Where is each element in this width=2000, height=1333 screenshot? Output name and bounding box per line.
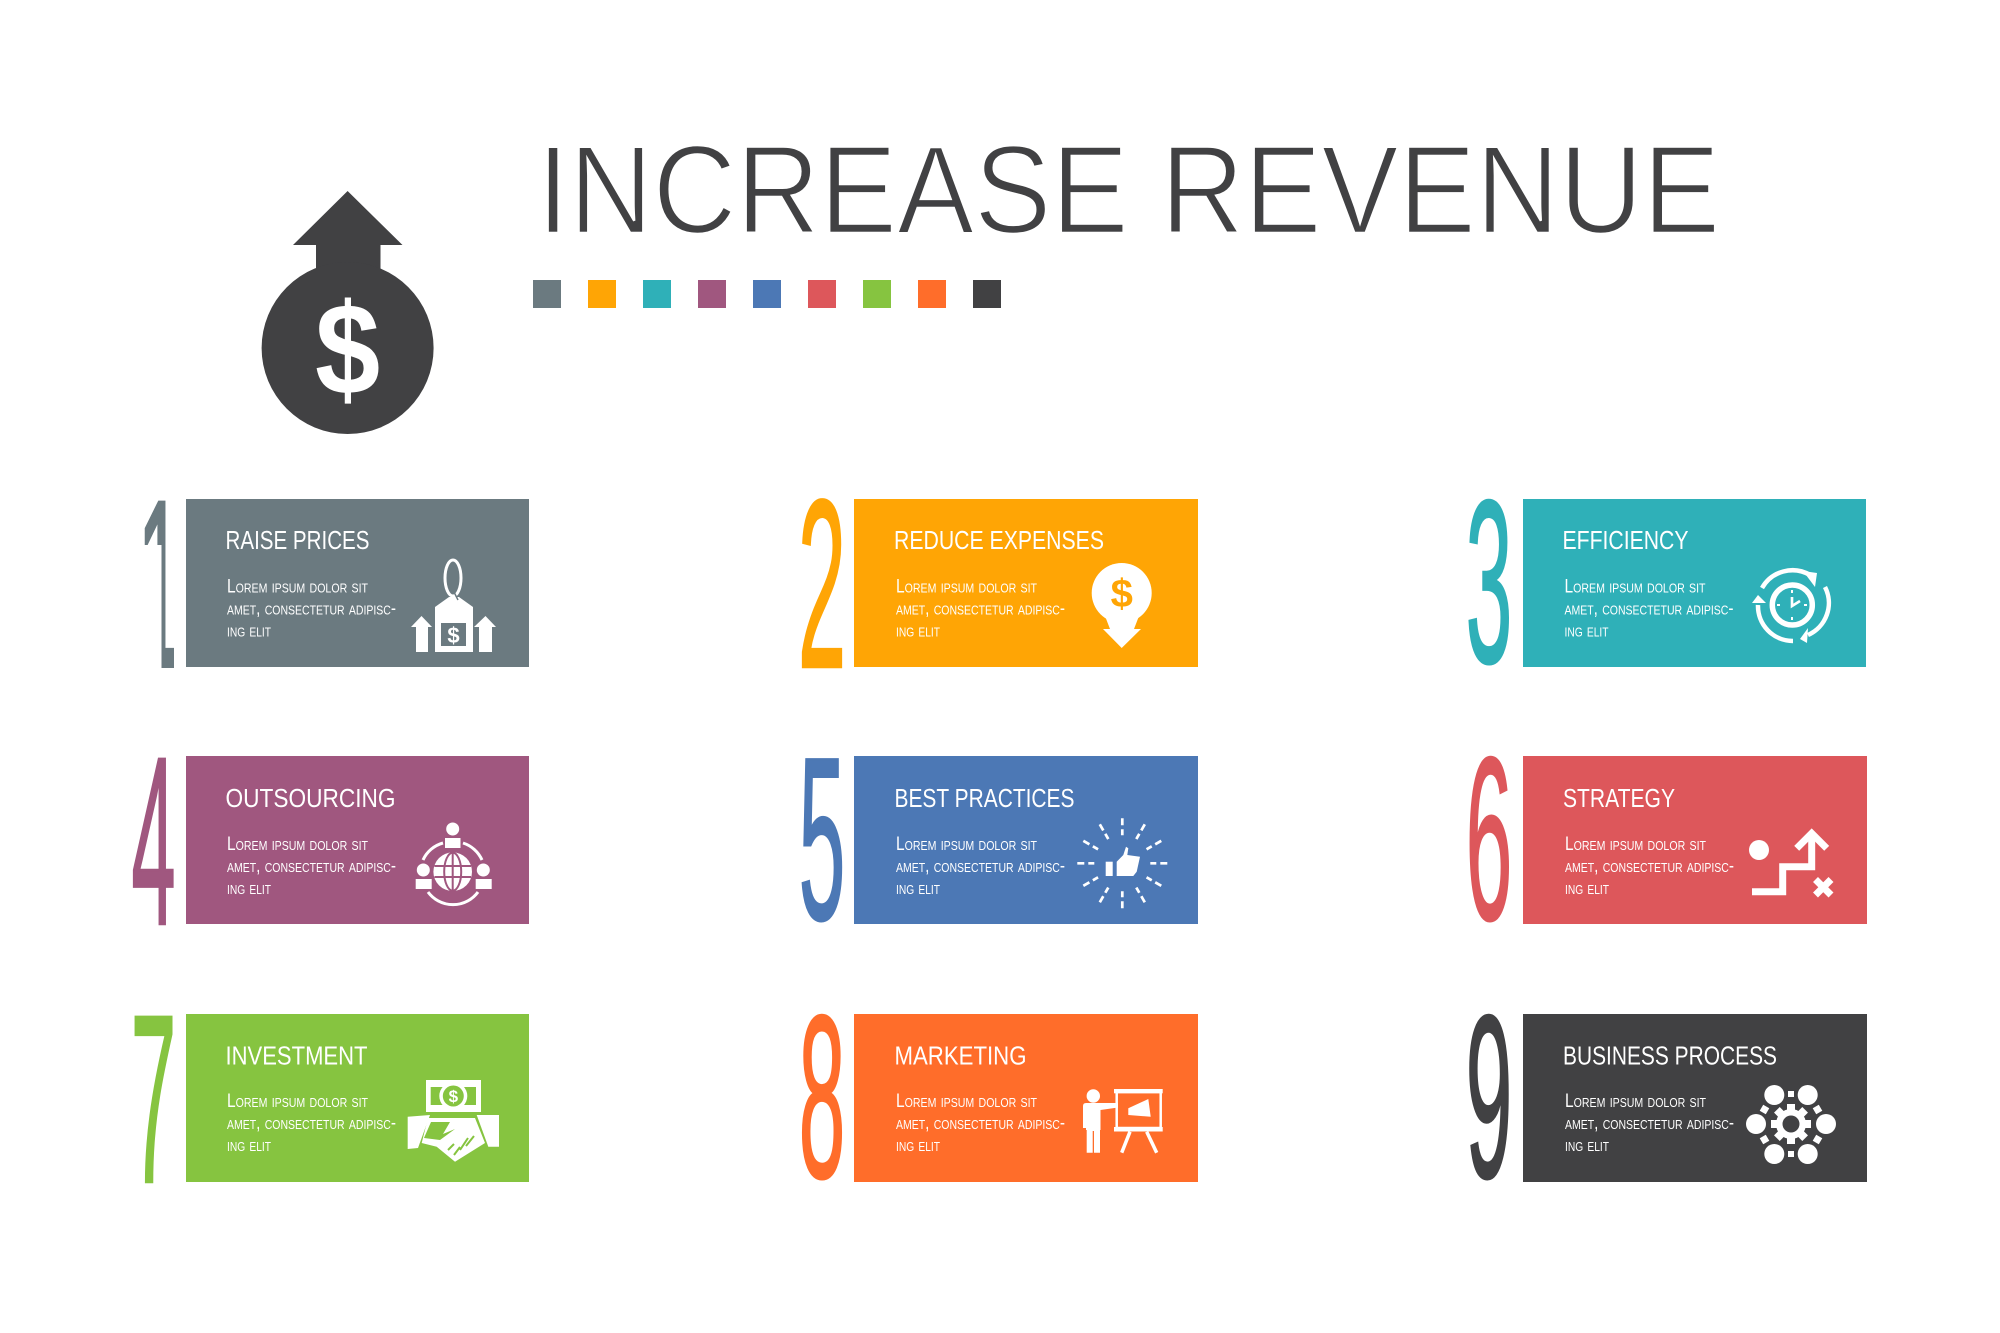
card background bbox=[1523, 756, 1867, 924]
panel: 6 strategy bbox=[1466, 709, 1867, 968]
icon: dollar pin with down arrow: $ bbox=[1111, 572, 1133, 616]
number 7: 7 bbox=[131, 965, 176, 1233]
icon: price tag with arrows bbox=[411, 560, 496, 652]
panel: 3 efficiency bbox=[1466, 452, 1866, 711]
card background bbox=[186, 1014, 529, 1182]
heading: RAISE PRICES bbox=[226, 525, 370, 555]
body text bbox=[1565, 1091, 1734, 1156]
body text bbox=[896, 834, 1065, 899]
body text: ing elit bbox=[896, 878, 940, 899]
body text: ing elit bbox=[1564, 620, 1609, 642]
heading: EFFICIENCY bbox=[1562, 525, 1688, 555]
panel: 4 outsourcing bbox=[131, 706, 529, 975]
icon: price tag with arrows: $ bbox=[447, 623, 460, 648]
icon: strategy stairs bbox=[1749, 833, 1831, 895]
body text: Lorem ipsum dolor sit bbox=[227, 576, 368, 598]
heading: REDUCE EXPENSES bbox=[894, 525, 1104, 555]
body text: Lorem ipsum dolor sit bbox=[227, 834, 368, 855]
body text: Lorem ipsum dolor sit bbox=[896, 834, 1037, 855]
body text: ing elit bbox=[896, 620, 940, 642]
heading: MARKETING bbox=[894, 1040, 1026, 1070]
card background bbox=[1523, 499, 1866, 667]
body text bbox=[1565, 834, 1734, 899]
heading: STRATEGY bbox=[1563, 783, 1675, 813]
body text bbox=[227, 1091, 396, 1156]
body text: amet, consectetur adipisc- bbox=[227, 1113, 396, 1134]
body text: Lorem ipsum dolor sit bbox=[1564, 576, 1706, 598]
body text bbox=[896, 576, 1065, 642]
colour swatches bbox=[533, 280, 1001, 308]
icon: clock with cycle arrows bbox=[1752, 570, 1829, 643]
icon: dollar pin with down arrow bbox=[1092, 563, 1152, 648]
panel: 8 marketing bbox=[799, 967, 1198, 1226]
number 2: 2 bbox=[798, 451, 846, 719]
number 3: 3 bbox=[1466, 452, 1512, 711]
body text: Lorem ipsum dolor sit bbox=[896, 576, 1037, 598]
body text: amet, consectetur adipisc- bbox=[896, 598, 1065, 620]
icon: money bag with up arrow bbox=[262, 191, 434, 434]
body text: ing elit bbox=[1565, 1135, 1609, 1156]
icon: globe with people bbox=[416, 822, 492, 905]
card background bbox=[854, 499, 1198, 667]
card background bbox=[186, 499, 529, 667]
body text bbox=[1564, 576, 1734, 642]
icon: gear and process nodes bbox=[1746, 1085, 1836, 1164]
number 9: 9 bbox=[1466, 967, 1512, 1226]
body text: ing elit bbox=[896, 1135, 940, 1156]
panel: 7 investment bbox=[131, 965, 529, 1233]
title: INCREASE REVENUE bbox=[537, 121, 1720, 260]
body text: ing elit bbox=[1565, 878, 1609, 899]
heading: BEST PRACTICES bbox=[894, 783, 1074, 813]
body text: amet, consectetur adipisc- bbox=[1565, 1113, 1734, 1134]
body text: amet, consectetur adipisc- bbox=[227, 856, 396, 877]
number 1: 1 bbox=[137, 450, 183, 718]
heading: OUTSOURCING bbox=[226, 783, 396, 813]
body text: amet, consectetur adipisc- bbox=[1565, 856, 1734, 877]
body text: amet, consectetur adipisc- bbox=[896, 856, 1065, 877]
body text: ing elit bbox=[227, 1135, 271, 1156]
number 5: 5 bbox=[799, 709, 845, 968]
panel: 2 reduce expenses bbox=[798, 451, 1198, 719]
body text: amet, consectetur adipisc- bbox=[227, 598, 396, 620]
icon: presenter at board bbox=[1083, 1089, 1163, 1153]
card background bbox=[186, 756, 529, 924]
number 4: 4 bbox=[131, 706, 176, 975]
card background bbox=[854, 1014, 1198, 1182]
body text: Lorem ipsum dolor sit bbox=[1565, 834, 1706, 855]
icon: money bag with up arrow: $ bbox=[315, 277, 380, 422]
body text bbox=[227, 834, 396, 899]
number 8: 8 bbox=[799, 967, 845, 1226]
body text: ing elit bbox=[227, 878, 271, 899]
card background bbox=[854, 756, 1198, 924]
icon: banknote and handshake: $ bbox=[449, 1087, 459, 1106]
icon: thumbs up burst bbox=[1077, 818, 1167, 908]
body text: Lorem ipsum dolor sit bbox=[1565, 1091, 1706, 1112]
body text: amet, consectetur adipisc- bbox=[1564, 598, 1734, 620]
number 6: 6 bbox=[1466, 709, 1512, 968]
heading: BUSINESS PROCESS bbox=[1563, 1040, 1777, 1070]
body text: Lorem ipsum dolor sit bbox=[896, 1091, 1037, 1112]
body text: ing elit bbox=[227, 620, 271, 642]
icon: banknote and handshake bbox=[408, 1080, 499, 1162]
body text bbox=[896, 1091, 1065, 1156]
body text: Lorem ipsum dolor sit bbox=[227, 1091, 368, 1112]
body text bbox=[227, 576, 396, 642]
card background bbox=[1523, 1014, 1867, 1182]
heading: INVESTMENT bbox=[226, 1040, 368, 1070]
panel: 9 business process bbox=[1466, 967, 1867, 1226]
panel: 1 raise prices bbox=[144, 499, 529, 668]
body text: amet, consectetur adipisc- bbox=[896, 1113, 1065, 1134]
panel: 5 best practices bbox=[799, 709, 1198, 968]
